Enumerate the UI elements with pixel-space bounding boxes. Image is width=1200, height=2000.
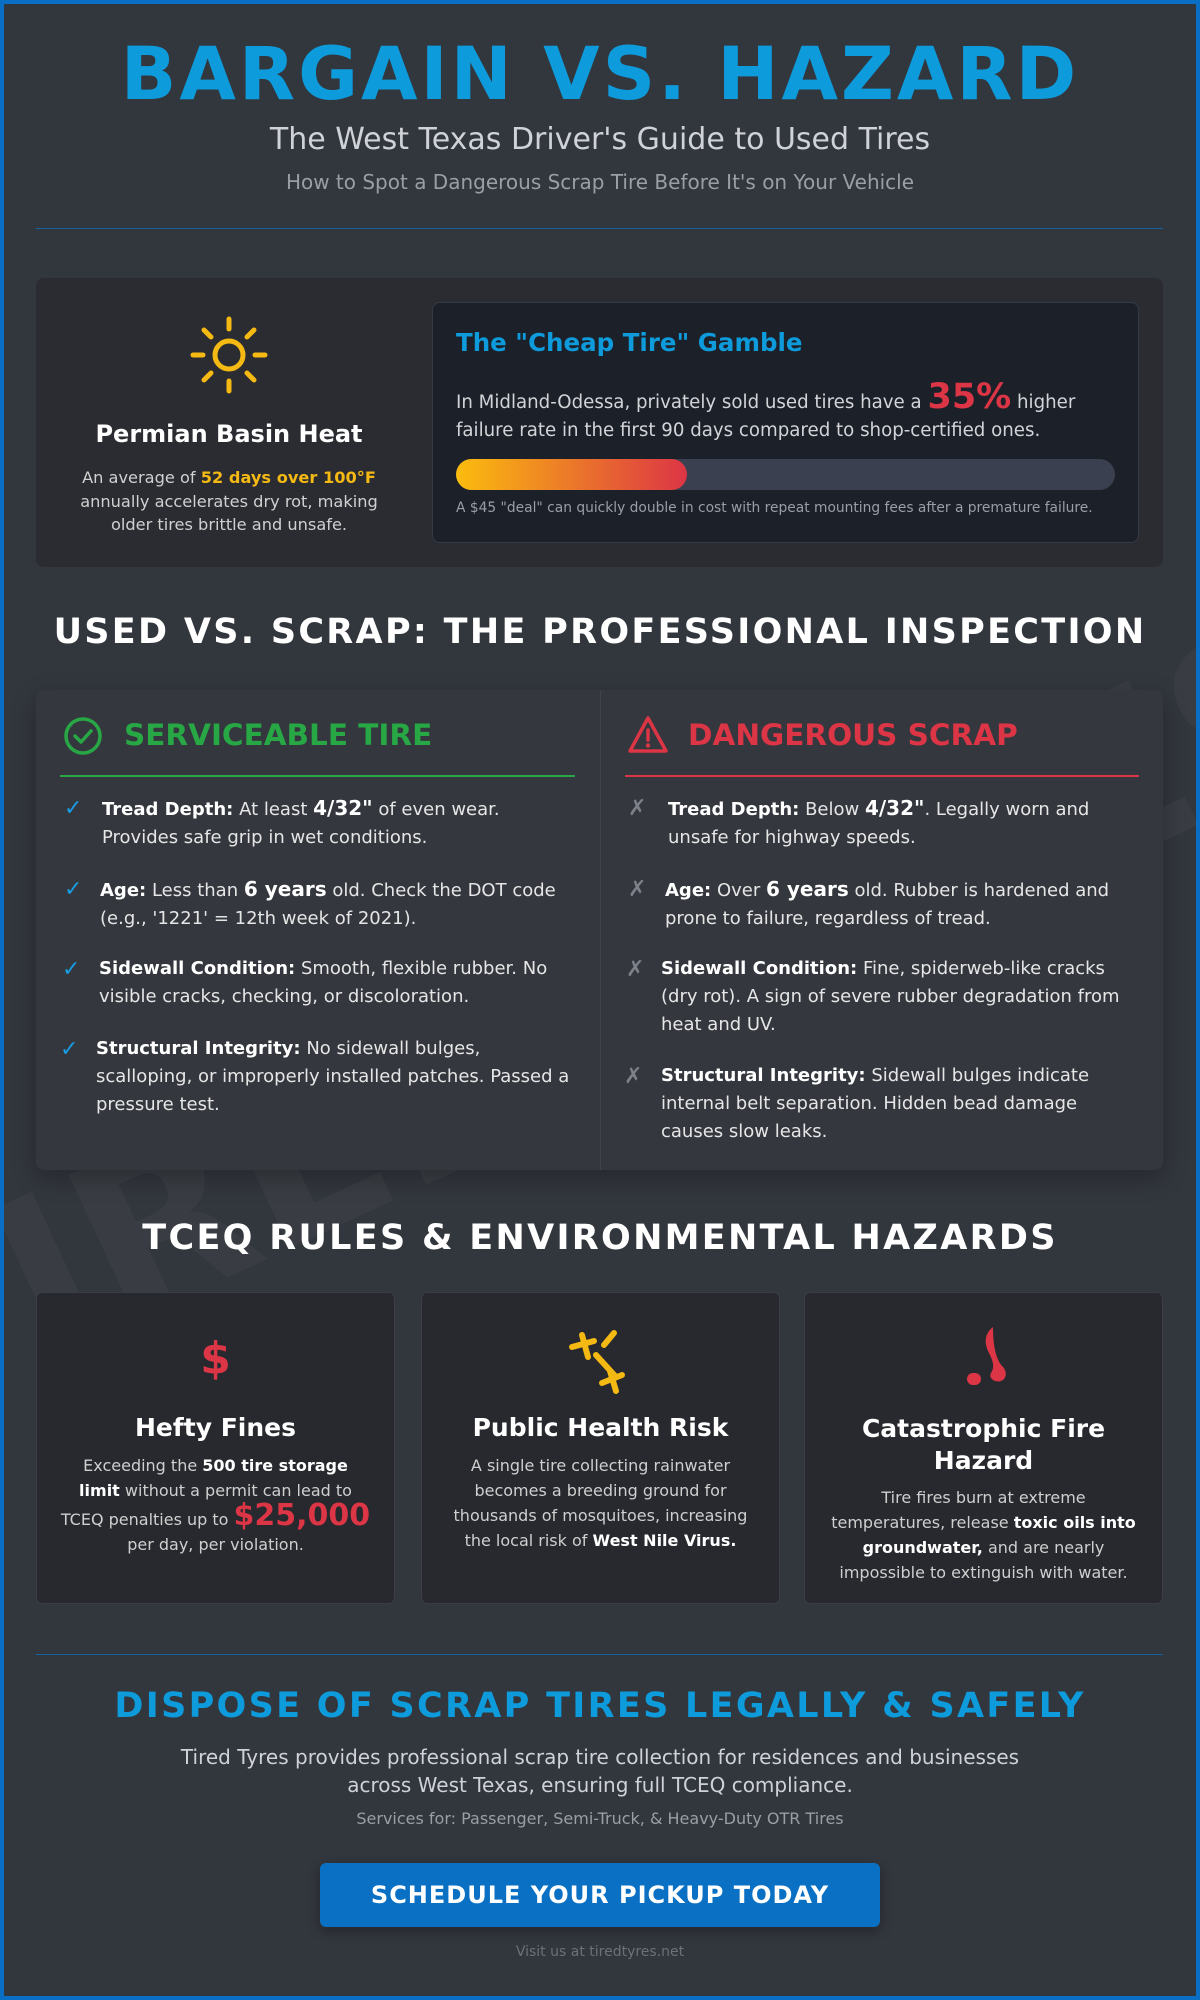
panel: inspection: ✓ — [62, 957, 80, 982]
card: cheap tire gamble — [432, 302, 1139, 543]
panel: inspection: Structural Integrity: Sidewall bulges indicate internal belt separation. Hidden bead damage causes slow leaks. — [661, 1065, 1089, 1142]
panel: inspection: ✗ — [628, 796, 646, 821]
panel: inspection: Tread Depth: Below 4/32". Legally worn and unsafe for highway speeds. — [668, 796, 1089, 848]
panel: inspection: Age: Less than 6 years old. Check the DOT code (e.g., '1221' = 12th week of 2021). — [100, 877, 556, 929]
tagline: How to Spot a Dangerous Scrap Tire Before It's on Your Vehicle — [286, 170, 914, 194]
footer: Visit us at tiredtyres.net — [516, 1944, 684, 1960]
button: schedule: SCHEDULE YOUR PICKUP TODAY — [371, 1881, 829, 1909]
card: fire hazard — [804, 1292, 1163, 1604]
card: fire hazard: Catastrophic Fire — [862, 1414, 1105, 1443]
panel: inspection: ✗ — [628, 877, 646, 902]
card: fire hazard: temperatures, release toxic oils into — [831, 1513, 1136, 1532]
icon: sun — [190, 316, 268, 394]
card: fire hazard: impossible to extinguish with water. — [839, 1563, 1128, 1582]
heading: inspection: USED VS. SCRAP: THE PROFESSIONAL INSPECTION — [54, 612, 1146, 652]
panel: inspection: ✗ — [624, 1064, 642, 1089]
card: public health: A single tire collecting rainwater — [471, 1456, 730, 1475]
bar chart — [456, 459, 1115, 490]
heading: dangerous scrap: DANGEROUS SCRAP — [688, 718, 1018, 752]
heading: dispose: DISPOSE OF SCRAP TIRES LEGALLY & SAFELY — [114, 1686, 1086, 1726]
panel: inspection — [36, 690, 1163, 1170]
icon: oil drop — [967, 1327, 1006, 1385]
card: fire hazard: groundwater, and are nearly — [863, 1538, 1104, 1557]
icon: warning triangle — [628, 716, 668, 753]
panel: inspection: ✗ — [626, 957, 644, 982]
text: heat: An average of 52 days over 100°F annually accelerates dry rot, making older tires brittle and unsafe. — [80, 468, 378, 534]
panel: inspection: ✓ — [60, 1037, 78, 1062]
subtitle: The West Texas Driver's Guide to Used Tires — [270, 122, 930, 157]
text: dispose: Tired Tyres provides professional scrap tire collection for residences and businesses across West Texas, ensuring full TCEQ compliance. — [181, 1745, 1019, 1797]
card: public health: thousands of mosquitoes, increasing — [454, 1506, 747, 1525]
card: hefty fines: limit without a permit can lead to — [79, 1481, 352, 1500]
title: BARGAIN VS. HAZARD — [121, 32, 1079, 117]
panel: inspection: Structural Integrity: No sidewall bulges, scalloping, or improperly installed patches. Passed a pressure test. — [96, 1038, 569, 1115]
list: serviceable — [60, 796, 569, 1115]
card: hefty fines — [36, 1292, 395, 1604]
button: schedule — [320, 1863, 880, 1927]
card: hefty fines: TCEQ penalties up to $25,000 — [61, 1498, 370, 1533]
card: public health — [421, 1292, 780, 1604]
card: hefty fines: per day, per violation. — [127, 1535, 304, 1554]
panel: inspection: Age: Over 6 years old. Rubber is hardened and prone to failure, regardless of tread. — [665, 877, 1109, 929]
panel: inspection: Sidewall Condition: Smooth, flexible rubber. No visible cracks, checking, or discoloration. — [99, 958, 547, 1007]
panel: inspection: ✓ — [64, 796, 82, 821]
card: public health: the local risk of West Nile Virus. — [465, 1531, 736, 1550]
card: fire hazard: Tire fires burn at extreme — [881, 1488, 1086, 1507]
heading: serviceable: SERVICEABLE TIRE — [124, 718, 432, 752]
icon: check circle — [64, 717, 102, 755]
card: cheap tire gamble: The "Cheap Tire" Gamble — [456, 328, 803, 357]
panel: heat and gamble — [36, 278, 1163, 567]
list: dangerous — [624, 796, 1120, 1142]
heading: permian basin heat: Permian Basin Heat — [95, 420, 363, 448]
panel: inspection: ✓ — [64, 877, 82, 902]
card: cheap tire gamble: In Midland-Odessa, privately sold used tires have a 35% higher failure rate in the first 90 days compared to shop-certified ones. — [456, 377, 1075, 441]
card: hefty fines: Exceeding the 500 tire storage — [83, 1456, 348, 1475]
panel: inspection: Sidewall Condition: Fine, spiderweb-like cracks (dry rot). A sign of severe rubber degradation from heat and UV. — [661, 958, 1120, 1035]
text: services: Services for: Passenger, Semi-Truck, & Heavy-Duty OTR Tires — [356, 1809, 844, 1828]
card: hefty fines: Hefty Fines — [135, 1413, 296, 1442]
icon: mosquito — [569, 1330, 625, 1394]
heading: tceq: TCEQ RULES & ENVIRONMENTAL HAZARDS — [142, 1218, 1058, 1258]
icon: dollar: $ — [200, 1333, 231, 1384]
panel: inspection: Tread Depth: At least 4/32" of even wear. Provides safe grip in wet conditions. — [102, 796, 500, 848]
card: public health: becomes a breeding ground for — [474, 1481, 727, 1500]
card: public health: Public Health Risk — [473, 1413, 728, 1442]
card: fire hazard: Hazard — [934, 1446, 1033, 1475]
card: cheap tire gamble: A $45 "deal" can quickly double in cost with repeat mounting fees after a premature failure. — [456, 500, 1093, 516]
